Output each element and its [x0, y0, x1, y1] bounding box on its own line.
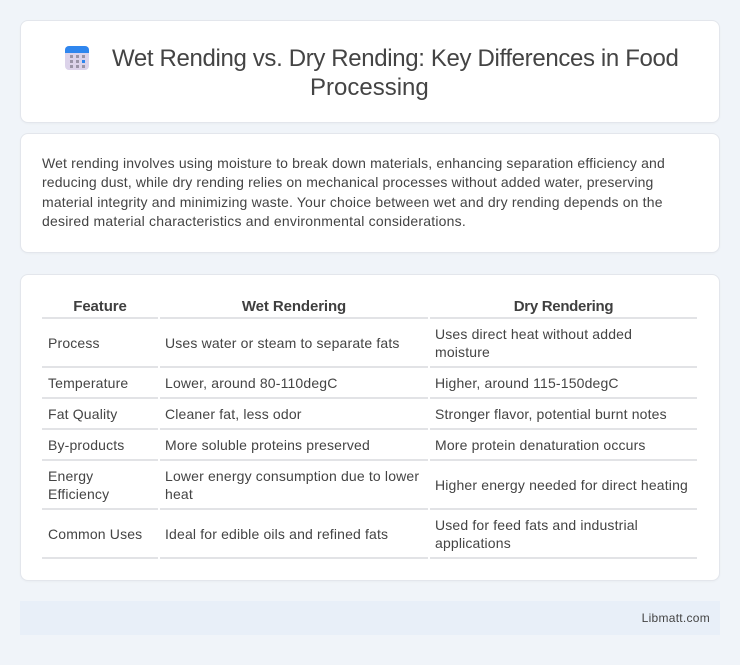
comparison table: Stronger flavor, potential burnt notes [435, 406, 667, 422]
footer [20, 601, 720, 635]
title: Wet Rending vs. Dry Rending: Key Differences in Food [112, 45, 679, 72]
comparison table: Energy [48, 468, 93, 484]
comparison table: Higher energy needed for direct heating [435, 477, 688, 493]
panel: comparison table [20, 274, 720, 581]
footer: Libmatt.com [642, 611, 710, 625]
intro paragraph: desired material characteristics and environmental considerations. [42, 213, 466, 229]
comparison table: Feature [73, 298, 127, 315]
comparison table: Ideal for edible oils and refined fats [165, 526, 388, 542]
comparison table: heat [165, 486, 193, 502]
comparison table: More protein denaturation occurs [435, 437, 646, 453]
icon: calendar grid [65, 46, 89, 70]
comparison table: Uses direct heat without added [435, 326, 632, 342]
comparison table: Common Uses [48, 526, 142, 542]
title: Processing [310, 74, 429, 101]
comparison table [42, 298, 697, 559]
comparison table: moisture [435, 344, 490, 360]
comparison table: Higher, around 115-150degC [435, 375, 619, 391]
panel: intro text [20, 133, 720, 253]
comparison table: Wet Rendering [242, 298, 346, 315]
comparison table: Cleaner fat, less odor [165, 406, 302, 422]
comparison table: More soluble proteins preserved [165, 437, 370, 453]
comparison table: applications [435, 535, 511, 551]
intro paragraph: Wet rending involves using moisture to break down materials, enhancing separation efficiency and [42, 155, 665, 171]
comparison table: Fat Quality [48, 406, 117, 422]
comparison table: Used for feed fats and industrial [435, 517, 638, 533]
comparison table: By-products [48, 437, 124, 453]
title [112, 45, 679, 101]
intro paragraph: reducing dust, while dry rending relies on mechanical processes without added water, preserving [42, 174, 653, 190]
header card [20, 20, 720, 123]
comparison table: Temperature [48, 375, 128, 391]
comparison table: Efficiency [48, 486, 109, 502]
comparison table: Lower, around 80-110degC [165, 375, 337, 391]
comparison table: Dry Rendering [514, 298, 613, 315]
comparison table: Uses water or steam to separate fats [165, 335, 400, 351]
comparison table: Lower energy consumption due to lower [165, 468, 419, 484]
intro paragraph [42, 155, 665, 229]
intro paragraph: material integrity and minimizing waste. Your choice between wet and dry rending depends on the [42, 194, 663, 210]
comparison table: Process [48, 335, 100, 351]
